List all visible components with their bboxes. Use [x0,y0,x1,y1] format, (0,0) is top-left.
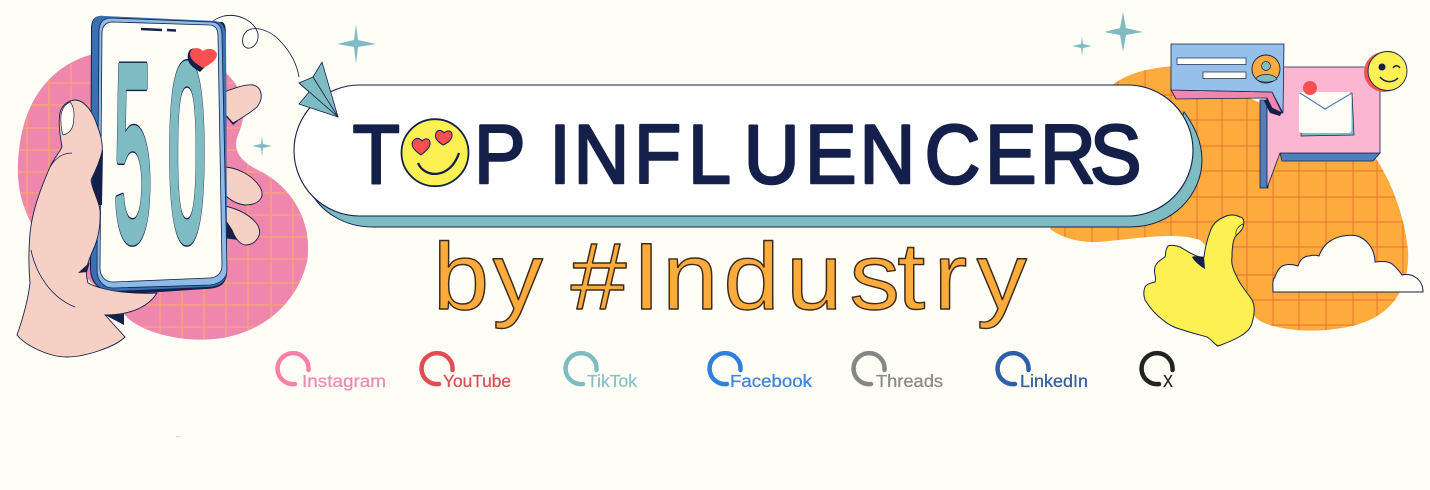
pink message bubble [1260,100,1268,188]
winking smiley [1364,52,1407,92]
heart icon [188,48,217,72]
legend: Threads [854,353,943,391]
legend: Facebook: Facebook [730,371,812,391]
legend: TikTok [566,353,637,391]
pill body [294,85,1193,216]
small stray mark [176,436,181,437]
legend: X: X [1163,371,1173,391]
heart-eyes smiley [402,119,468,186]
number 50: 0 [168,12,206,292]
title text: TOP INFLUENCERS [353,108,1141,202]
orange grid blob [1050,66,1408,331]
legend: TikTok: TikTok [587,371,637,391]
legend: Instagram [278,353,386,391]
phone shadow and body [90,16,227,294]
chat cards [1171,44,1380,188]
thumbnail [61,102,74,135]
legend: LinkedIn [998,353,1088,391]
fingers behind phone [222,85,262,245]
blue profile card [1171,90,1282,113]
hand with thumb [17,100,157,357]
speaker [141,29,176,30]
legend: YouTube [422,353,511,391]
curly flight path [204,15,299,77]
number 50: 0 [168,12,206,292]
avatar icon [1252,55,1280,83]
legend: Threads: Threads [876,371,943,391]
platform legend [278,353,1173,391]
number 50 [114,12,206,292]
card tail shadow [1264,95,1282,116]
pill shadow [310,112,1202,227]
phone screen [100,22,222,282]
hand creases [31,153,75,307]
cloud icon [1273,235,1423,292]
number 50: 5 [114,12,152,292]
sparkles [252,12,1143,157]
legend: X [1142,353,1173,391]
legend: Facebook [710,353,812,391]
pink grid blob [10,40,315,340]
envelope icon [1299,81,1354,136]
paper plane icon [299,62,338,117]
number 50: 5 [114,12,152,292]
legend: YouTube: YouTube [443,371,511,391]
title pill [294,85,1202,227]
phone [90,12,227,294]
legend: Instagram: Instagram [302,371,386,391]
subtitle: by #Industry [433,223,1027,329]
thumbs up icon [1144,215,1254,346]
legend: LinkedIn: LinkedIn [1020,371,1088,391]
